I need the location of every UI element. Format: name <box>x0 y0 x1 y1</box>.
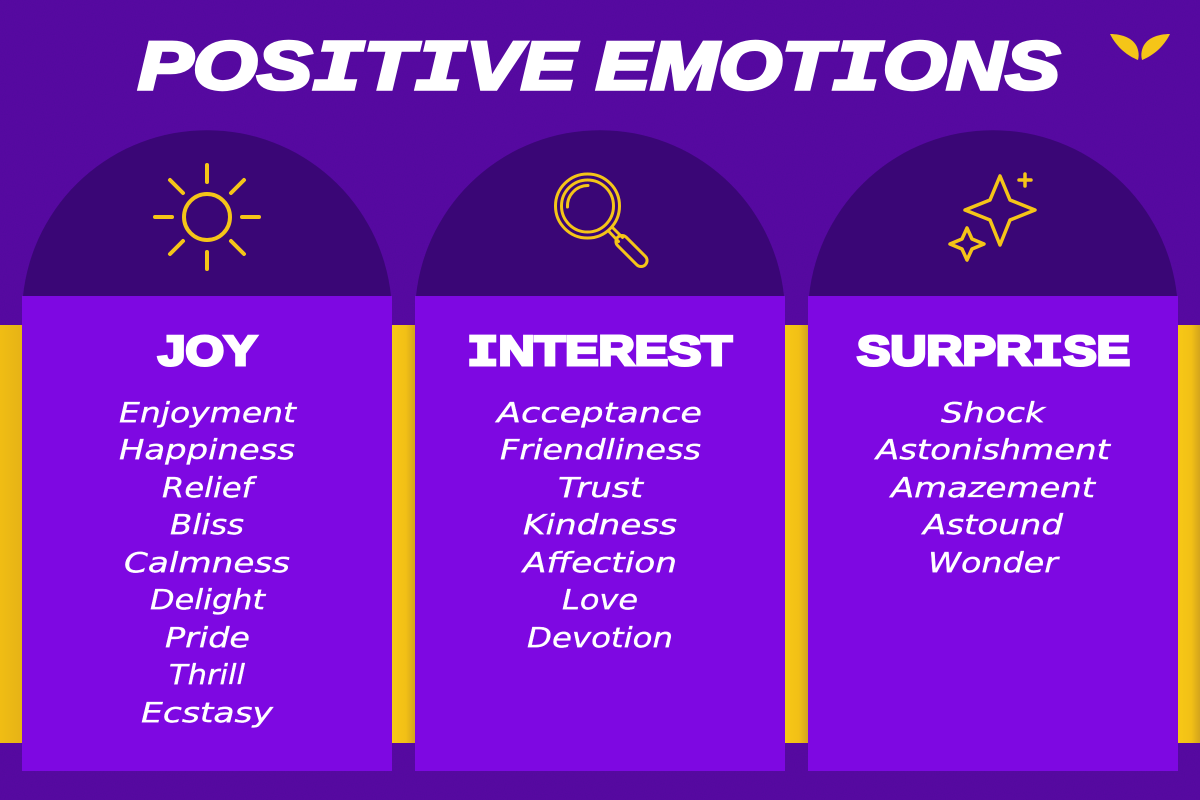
list: surprise emotions: Shock <box>941 397 1046 429</box>
list: joy emotions: Thrill <box>169 659 245 691</box>
list: interest emotions: Devotion <box>527 622 673 654</box>
arch: interest <box>416 130 784 296</box>
list: joy emotions: Bliss <box>170 509 244 541</box>
title: EMOT IONS <box>596 28 1060 111</box>
heading: joy: JOY <box>158 327 257 374</box>
list: joy emotions: Happiness <box>119 434 295 466</box>
list: interest emotions <box>494 397 702 654</box>
card: interest <box>415 296 785 771</box>
arch: surprise <box>809 130 1177 296</box>
list: surprise emotions: Amazement <box>889 472 1096 504</box>
panel: interest <box>415 130 785 771</box>
title: POS ITIVE <box>138 28 579 111</box>
list: surprise emotions <box>874 397 1111 579</box>
icon: magnifying glass <box>556 174 650 269</box>
list: joy emotions: Calmness <box>124 547 290 579</box>
card: joy <box>22 296 392 771</box>
list: joy emotions: Relief <box>162 472 258 504</box>
title <box>138 28 1060 111</box>
list: joy emotions: Ecstasy <box>141 697 274 729</box>
list: joy emotions: Delight <box>150 584 266 616</box>
list: joy emotions: Pride <box>165 622 250 654</box>
list: interest emotions: Love <box>562 584 638 616</box>
list: interest emotions: Friendliness <box>500 434 701 466</box>
list: joy emotions: Enjoyment <box>119 397 297 429</box>
logo: yellow wings <box>1110 34 1170 60</box>
arch: joy <box>23 130 391 296</box>
list: surprise emotions: Wonder <box>928 547 1060 579</box>
icon: sun <box>155 165 259 269</box>
heading: interest: INTEREST <box>467 327 732 379</box>
list: interest emotions: Kindness <box>523 509 677 541</box>
card: surprise <box>808 296 1178 771</box>
list: joy emotions <box>119 397 297 729</box>
list: interest emotions: Acceptance <box>494 397 702 429</box>
yellow band <box>0 325 1200 743</box>
heading: surprise: SURPR ISE <box>857 327 1130 379</box>
list: surprise emotions: Astound <box>921 509 1064 541</box>
panel: joy <box>22 130 392 771</box>
panel: surprise <box>808 130 1178 771</box>
list: interest emotions: Affection <box>521 547 677 579</box>
list: interest emotions: Trust <box>558 472 645 504</box>
list: surprise emotions: Astonishment <box>874 434 1111 466</box>
icon: sparkles <box>950 174 1035 260</box>
